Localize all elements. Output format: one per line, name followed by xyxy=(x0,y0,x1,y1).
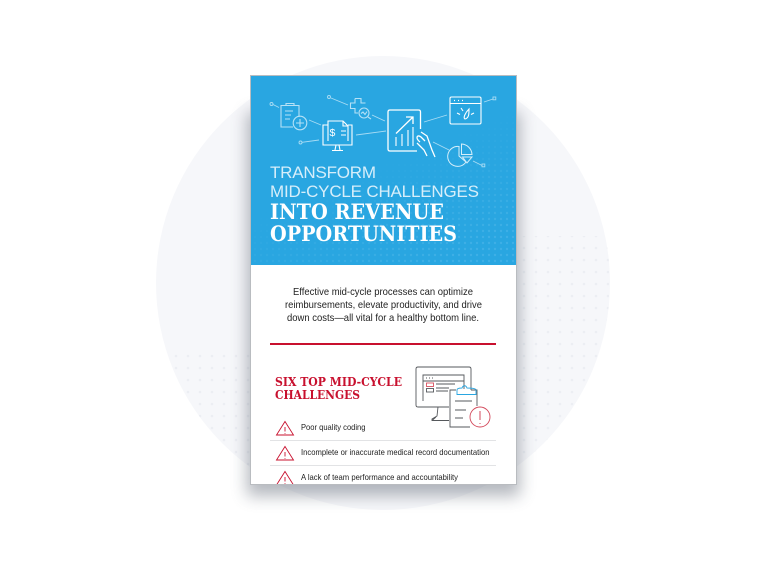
connector lines xyxy=(270,96,496,167)
section heading xyxy=(275,374,402,402)
intro paragraph xyxy=(285,287,482,324)
card shadow xyxy=(247,112,520,496)
item: poor quality coding: Poor quality coding xyxy=(301,422,366,432)
icon: browser with gauge xyxy=(450,97,481,124)
red divider xyxy=(270,343,496,345)
title: bold lines xyxy=(270,200,457,247)
intro paragraph: Effective mid-cycle processes can optimize xyxy=(293,287,473,298)
item: incomplete documentation: Incomplete or inaccurate medical record documentation xyxy=(301,447,490,457)
background circle xyxy=(156,56,610,510)
title: light lines: MID-CYCLE CHALLENGES xyxy=(270,182,479,201)
poster card xyxy=(250,76,516,485)
section heading: CHALLENGES xyxy=(275,387,360,402)
icon: medical cross with magnifier xyxy=(350,98,371,119)
panel: blue header xyxy=(251,76,516,265)
title: light lines: TRANSFORM xyxy=(270,163,376,182)
title: bold lines: OPPORTUNITIES xyxy=(270,222,457,247)
icon: pie chart xyxy=(448,144,472,166)
icon: clipboard with plus xyxy=(281,104,307,130)
intro paragraph: reimbursements, elevate productivity, and drive xyxy=(285,300,482,311)
item: poor quality coding xyxy=(276,422,366,435)
challenge list xyxy=(270,422,496,485)
icon: monitor with invoice: $ xyxy=(330,127,336,139)
section heading: SIX TOP MID-CYCLE xyxy=(275,374,402,389)
title: bold lines: INTO REVENUE xyxy=(270,200,444,225)
icon: monitor with invoice xyxy=(323,121,352,150)
item: incomplete documentation xyxy=(276,446,490,460)
item: lack of accountability xyxy=(276,472,459,485)
icon: monitor with clipboard and alert xyxy=(416,367,490,427)
intro paragraph: down costs—all vital for a healthy bottom line. xyxy=(287,313,479,324)
title: light lines xyxy=(270,163,479,201)
icon: tablet with growth chart and hand xyxy=(388,110,435,157)
item: lack of accountability: A lack of team performance and accountability xyxy=(301,472,459,482)
